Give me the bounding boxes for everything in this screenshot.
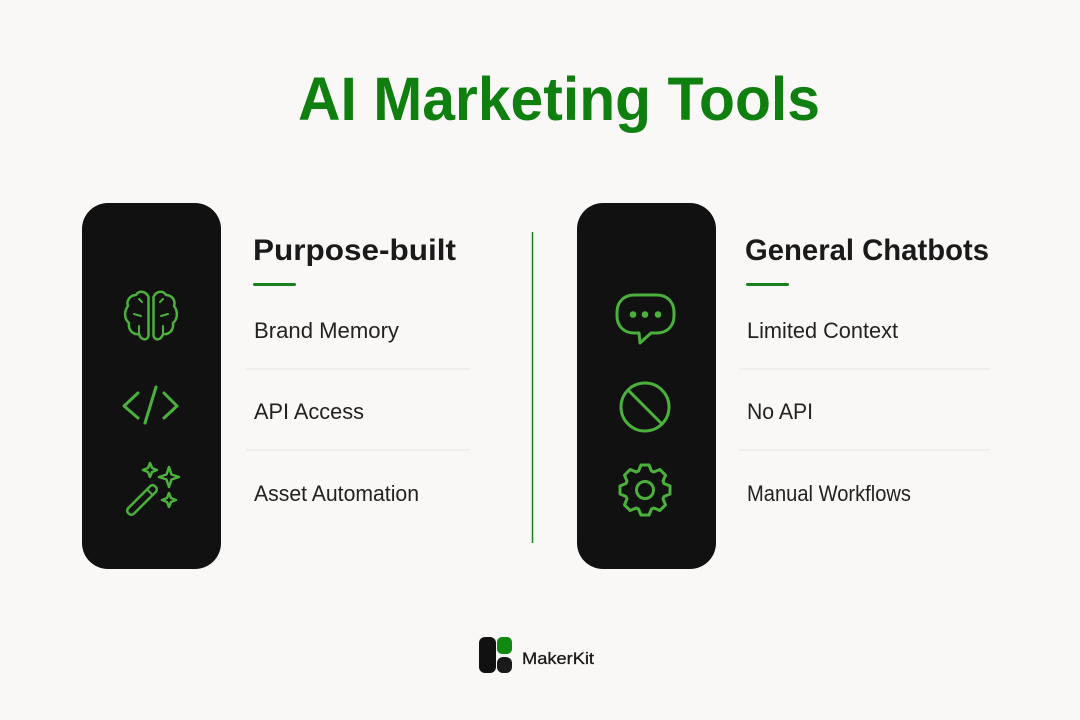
icon: brain: [125, 292, 177, 339]
title: AI Marketing Tools: [298, 65, 820, 133]
text: limited context: Limited Context: [747, 318, 898, 343]
icon: magic wand: [126, 463, 179, 516]
text: brand memory: Brand Memory: [254, 318, 399, 343]
text: no api: No API: [747, 399, 813, 424]
icon: prohibited sign: [621, 383, 669, 431]
logo wordmark: MakerKit: [522, 649, 594, 668]
icon: code brackets: [124, 387, 177, 423]
text: api access: API Access: [254, 399, 364, 424]
icon: speech bubble: [617, 295, 674, 343]
text: asset automation: Asset Automation: [254, 481, 419, 506]
panel: general chatbots icons: [577, 203, 716, 569]
logo: makerkit: [479, 637, 594, 673]
text: manual workflows: Manual Workflows: [747, 481, 911, 506]
heading: general chatbots: General Chatbots: [745, 234, 989, 267]
icon: gear: [620, 465, 670, 515]
logo mark: [479, 637, 512, 673]
heading: purpose-built: Purpose-built: [253, 234, 456, 267]
panel: purpose-built icons: [82, 203, 221, 569]
heading underline: [253, 283, 296, 286]
heading underline: [746, 283, 789, 286]
